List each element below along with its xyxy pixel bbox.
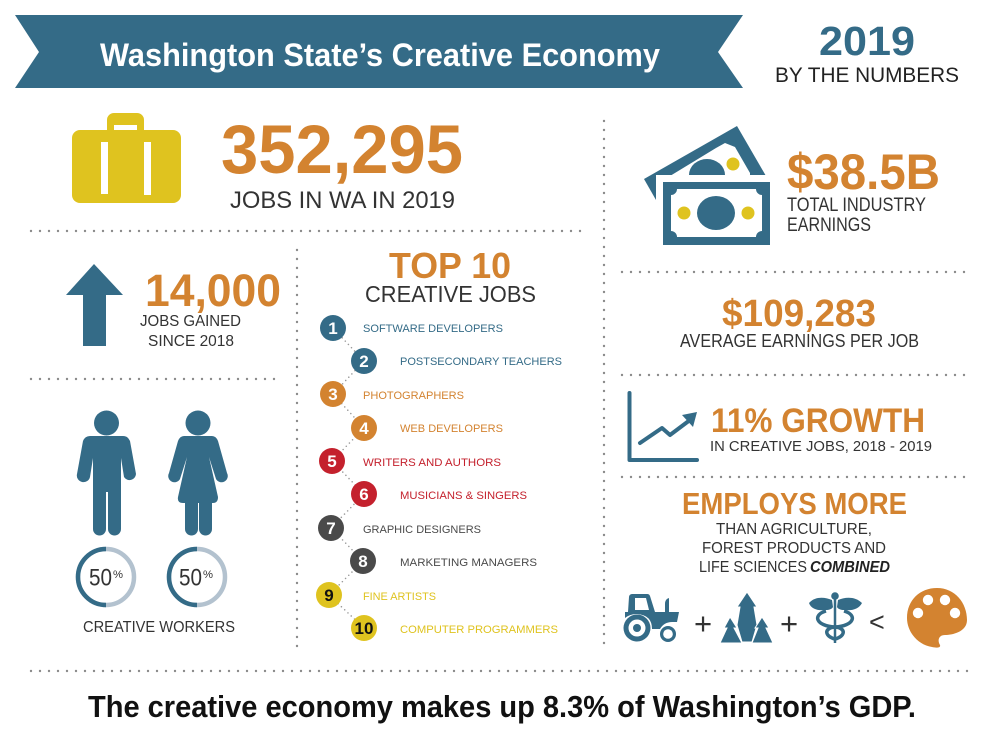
job 1 <box>320 315 503 341</box>
job 2 <box>351 348 562 374</box>
label: creative workers: CREATIVE WORKERS <box>83 619 235 636</box>
job 5 <box>319 448 501 474</box>
heading: top 10: TOP 10 <box>389 245 511 286</box>
stat: $38.5B: $38.5B <box>787 144 940 200</box>
job 5: WRITERS AND AUTHORS <box>363 457 501 469</box>
label: jobs gained since 2018: JOBS GAINED <box>140 313 241 330</box>
job 7 <box>318 515 481 541</box>
job 8: MARKETING MANAGERS <box>400 557 537 569</box>
panel: total industry earnings <box>644 126 940 250</box>
panel: top 10 creative jobs <box>316 245 562 641</box>
stat: 11% growth: 11% GROWTH <box>711 402 925 440</box>
ring: 50% men <box>78 549 134 605</box>
job 9 <box>316 582 436 608</box>
job 10 <box>351 615 558 641</box>
icon: caduceus <box>809 592 862 643</box>
panel: growth <box>630 393 932 460</box>
heading: top 10 <box>365 245 536 307</box>
ring: 50% men: 50 <box>89 564 112 592</box>
plus sign: + <box>780 606 798 641</box>
job 3: 3 <box>328 385 338 404</box>
job 2: 2 <box>359 352 369 371</box>
heading: top 10: CREATIVE JOBS <box>365 281 536 307</box>
panel: creative workers <box>77 410 235 636</box>
panel: employs more <box>624 486 967 648</box>
job 4 <box>351 415 503 441</box>
label: total industry earnings: EARNINGS <box>787 215 871 236</box>
job 8 <box>350 548 537 574</box>
text: comparison: FOREST PRODUCTS AND <box>702 540 886 557</box>
heading: employs more: EMPLOYS MORE <box>682 486 907 521</box>
icon: growth chart <box>630 393 697 460</box>
icon: up arrow <box>66 264 123 346</box>
panel: jobs gained <box>66 264 281 350</box>
job 10: COMPUTER PROGRAMMERS <box>400 624 558 636</box>
heading: 2019 by the numbers: BY THE NUMBERS <box>775 64 959 87</box>
job 1: SOFTWARE DEVELOPERS <box>363 323 503 335</box>
text: comparison: LIFE SCIENCES <box>699 559 807 576</box>
icon: tractor <box>624 594 679 642</box>
label: jobs in WA: JOBS IN WA IN 2019 <box>230 187 455 214</box>
job 7: GRAPHIC DESIGNERS <box>363 524 481 536</box>
icon: banknotes <box>644 126 770 250</box>
text: comparison: THAN AGRICULTURE, <box>716 521 872 538</box>
job 9: FINE ARTISTS <box>363 591 436 603</box>
label: jobs gained since 2018 <box>140 313 241 350</box>
job 3: PHOTOGRAPHERS <box>363 390 464 402</box>
icon: suitcase <box>72 113 181 203</box>
job 2: POSTSECONDARY TEACHERS <box>400 356 562 368</box>
job 6: 6 <box>359 485 369 504</box>
job 8: 8 <box>358 552 368 571</box>
job 6: MUSICIANS & SINGERS <box>400 490 527 502</box>
stat: $109,283: $109,283 <box>722 293 876 335</box>
title banner: Washington State’s Creative Economy <box>100 37 660 73</box>
stat: 352,295: 352,295 <box>221 111 463 188</box>
label: jobs gained since 2018: SINCE 2018 <box>148 333 234 350</box>
label: total industry earnings: TOTAL INDUSTRY <box>787 195 926 216</box>
stat: 14,000: 14,000 <box>145 265 281 316</box>
icon: paint palette <box>907 588 967 648</box>
title banner <box>15 15 743 88</box>
job 1: 1 <box>328 319 338 338</box>
ring: 50% women <box>169 549 225 605</box>
job 5: 5 <box>327 452 337 471</box>
icon: woman <box>168 410 228 536</box>
heading: 2019 by the numbers <box>775 18 959 87</box>
job 4: WEB DEVELOPERS <box>400 423 503 435</box>
job 4: 4 <box>359 419 369 438</box>
text: comparison: COMBINED <box>810 559 890 576</box>
ring: 50% men: % <box>113 569 123 581</box>
job 6 <box>351 481 527 507</box>
less-than sign: < <box>869 607 885 637</box>
job 3 <box>320 381 464 407</box>
icon: trees <box>720 592 773 643</box>
ring: 50% women: % <box>203 569 213 581</box>
label: in creative jobs: IN CREATIVE JOBS, 2018 - 2019 <box>710 438 932 455</box>
ring: 50% women: 50 <box>179 564 202 592</box>
heading: 2019 by the numbers: 2019 <box>819 18 915 64</box>
label: average earnings per job: AVERAGE EARNINGS PER JOB <box>680 330 919 351</box>
plus sign: + <box>694 606 712 641</box>
panel: total jobs <box>72 111 463 214</box>
label: total industry earnings <box>787 195 926 236</box>
panel: average earnings <box>680 293 919 351</box>
job 10: 10 <box>355 619 373 638</box>
footer statement: The creative economy makes up 8.3% of Washington’s GDP. <box>88 689 916 724</box>
job 7: 7 <box>326 519 336 538</box>
icon: man <box>77 410 136 536</box>
text: comparison <box>699 521 890 576</box>
job 9: 9 <box>324 586 334 605</box>
